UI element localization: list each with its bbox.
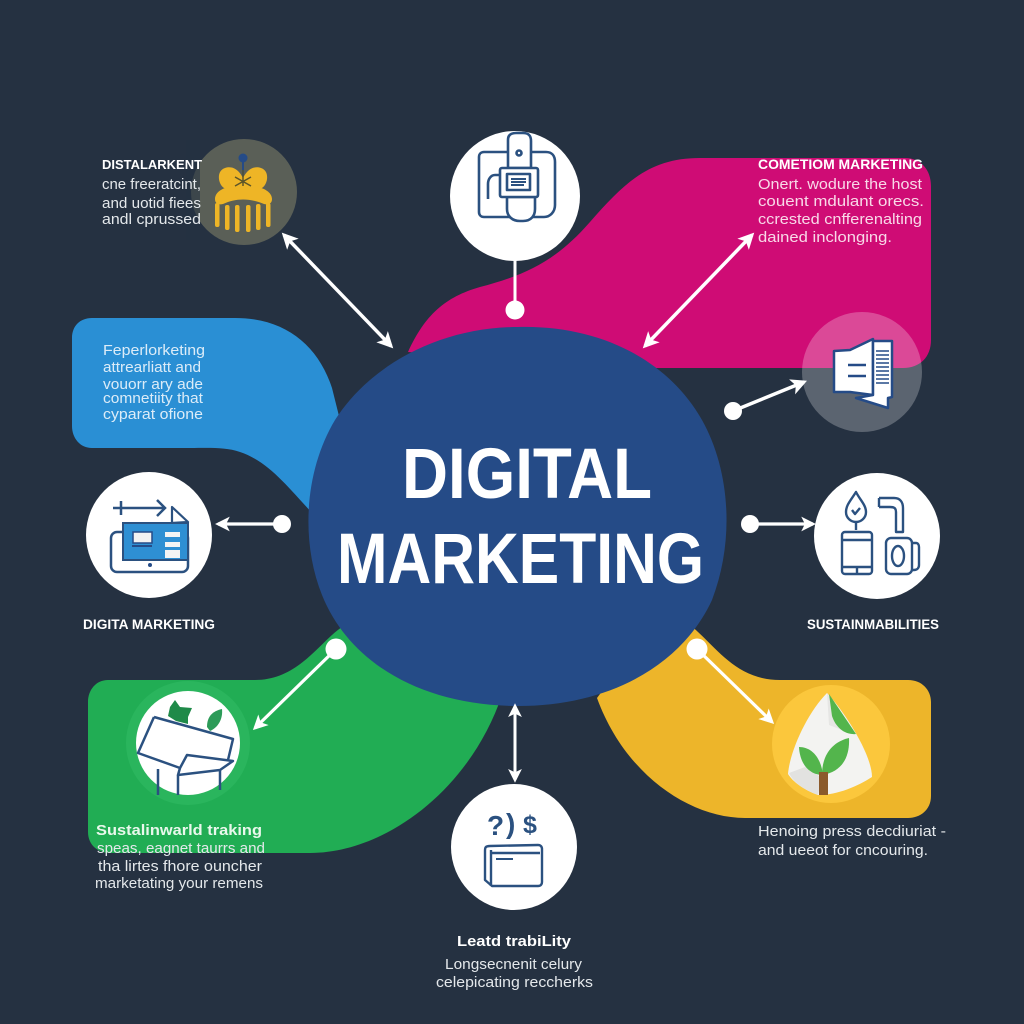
label: digital marketing: DIGITA MARKETING xyxy=(83,617,215,632)
pink panel text: couent mdulant orecs. xyxy=(758,194,924,210)
blue panel text: attrearliatt and xyxy=(103,360,201,376)
icon: computer xyxy=(86,472,212,598)
yellow text block: and ueeot for cncouring. xyxy=(758,843,928,859)
panel: green xyxy=(88,625,502,853)
green text block: Sustalinwarld traking xyxy=(96,823,262,839)
title xyxy=(337,435,704,599)
title: DIGITAL xyxy=(402,435,652,514)
panel: blue xyxy=(72,318,345,516)
top-left text block: cne freeratcint, xyxy=(102,177,201,193)
blue panel text: Feperlorketing xyxy=(103,343,205,359)
green text block: marketating your remens xyxy=(95,876,263,892)
blue panel text: vouorr ary ade xyxy=(103,377,203,393)
icon: phone and tap xyxy=(814,473,940,599)
center circle xyxy=(308,327,727,706)
bottom text block: celepicating reccherks xyxy=(436,975,593,991)
icon: book xyxy=(802,312,922,432)
blue panel text: cyparat ofione xyxy=(103,407,203,423)
blue panel text xyxy=(103,343,205,423)
arrow: yellow xyxy=(686,638,772,722)
label: sustainabilities: SUSTAINMABILITIES xyxy=(807,617,939,632)
icon: top device xyxy=(450,131,580,261)
pink panel text: ccrested cnfferenalting xyxy=(758,212,922,228)
icon: plant drop xyxy=(772,685,890,803)
green text block xyxy=(95,823,265,892)
yellow text block: Henoing press decdiuriat - xyxy=(758,824,946,840)
arrow: to phone xyxy=(741,515,813,533)
top-left text block: andl cprussed xyxy=(102,212,201,228)
connector: top xyxy=(506,250,524,320)
blue panel text: comnetiity that xyxy=(103,391,203,407)
pink panel heading: COMETIOM MARKETING xyxy=(758,156,923,172)
icon: yellow crown xyxy=(186,139,297,245)
top-left text block: DISTALARKENT xyxy=(102,157,202,172)
yellow text block xyxy=(758,824,946,859)
green text block: speas, eagnet taurrs and xyxy=(97,841,265,857)
arrow: green xyxy=(255,638,346,728)
arrow: to book xyxy=(724,382,804,420)
icon: wallet: ? xyxy=(487,810,504,841)
panel: pink xyxy=(408,156,931,368)
pink panel text: dained inclonging. xyxy=(758,230,892,246)
arrow: bottom xyxy=(514,706,516,780)
arrow: top-left xyxy=(284,235,391,346)
bottom text block: Leatd trabiLity xyxy=(457,933,572,950)
green text block: tha lirtes fhore ouncher xyxy=(98,859,262,875)
top-left text block: and uotid fiees xyxy=(102,196,201,212)
top-left text block xyxy=(102,157,202,228)
icon: wallet: $ xyxy=(523,811,537,839)
icon: wallet xyxy=(451,784,577,910)
panel: yellow xyxy=(597,625,931,818)
arrow: to computer xyxy=(218,515,291,533)
pink panel text: Onert. wodure the host xyxy=(758,177,922,193)
icon: box with leaves xyxy=(126,681,250,805)
pink panel text xyxy=(758,177,924,246)
bottom text block: Longsecnenit celury xyxy=(445,957,583,973)
bottom text block xyxy=(436,933,593,991)
icon: wallet: ) xyxy=(506,808,515,839)
title: MARKETING xyxy=(337,520,704,599)
arrow: top-right xyxy=(645,235,752,346)
